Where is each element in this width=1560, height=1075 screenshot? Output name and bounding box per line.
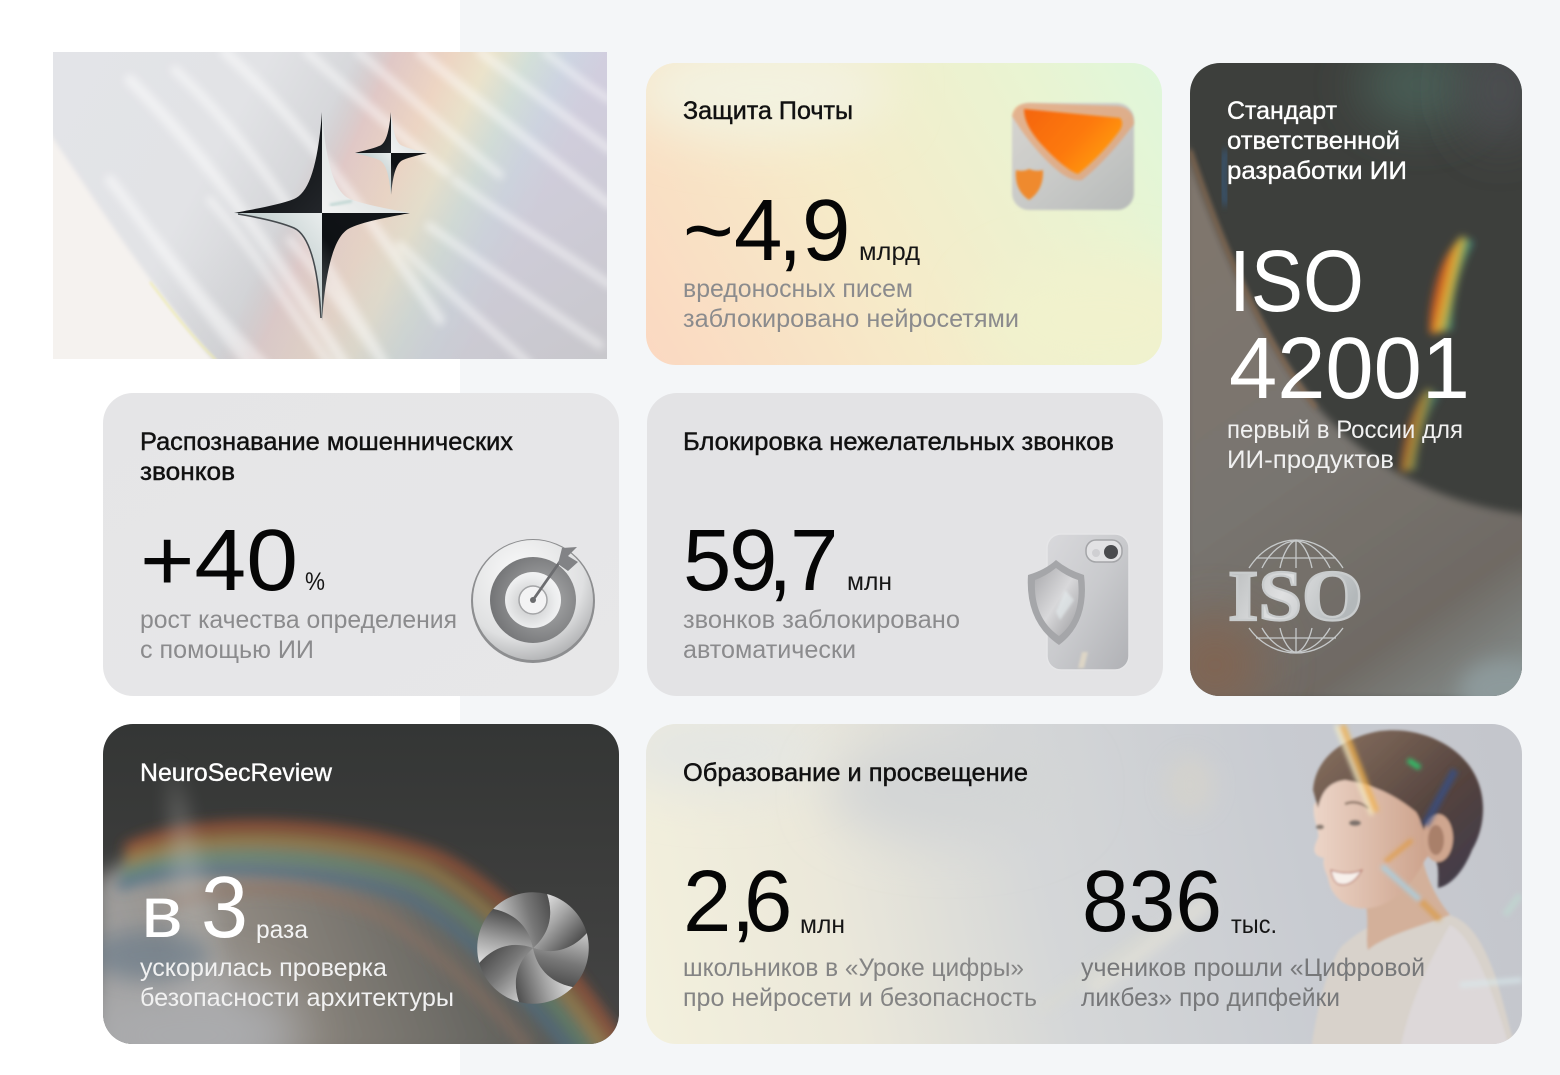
heading: AI development standard: разработки ИИ [1227, 157, 1407, 185]
big number: 2.6 million [683, 853, 845, 950]
heading: NeuroSecReview: NeuroSecReview [140, 759, 333, 787]
panel: fraud call detection [103, 393, 619, 696]
big number: 2.6 million: млн [800, 911, 845, 939]
heading: AI development standard: ответственной [1227, 127, 1400, 155]
big number: 3 times: в [141, 873, 183, 953]
big number: 836 thousand: тыс. [1231, 911, 1277, 939]
panel: ISO standard [1190, 63, 1522, 696]
big text: ISO 42001 [1229, 233, 1470, 417]
heading: fraud call detection: Распознавание мошеннических [140, 428, 513, 456]
icon: ISO logo globe: ISO [1228, 556, 1363, 636]
description: first in Russia: ИИ-продуктов [1227, 446, 1394, 474]
description: first in Russia [1227, 416, 1463, 474]
icon: chrome swirl flower [459, 874, 607, 1022]
big number: 3 times: раза [256, 916, 308, 944]
icon: large chrome star [234, 112, 410, 321]
heading: mail protection: Защита Почты [683, 97, 853, 125]
big number: plus 40 percent: +40 [140, 512, 298, 609]
description: deepfake literacy: учеников прошли «Цифровой [1081, 954, 1425, 982]
heading: fraud call detection [140, 428, 513, 486]
big number: 3 times: 3 [201, 859, 248, 956]
description: digital lesson [683, 954, 1037, 1012]
big text: ISO 42001: 42001 [1229, 320, 1470, 417]
description: faster architecture review [140, 954, 454, 1012]
description: blocked emails: заблокировано нейросетями [683, 305, 1019, 333]
big number: 4.9 billion: ~4,9 [683, 182, 850, 279]
description: first in Russia: первый в России для [1227, 416, 1463, 444]
illustration: smiling boy in profile [1311, 730, 1516, 1050]
big number: 4.9 billion: млрд [859, 238, 920, 266]
icon: silver phone with shield [1028, 534, 1129, 670]
big number: 59.7 million: 59,7 [683, 512, 838, 609]
description: deepfake literacy [1081, 954, 1425, 1012]
description: quality growth [140, 606, 457, 664]
description: calls blocked automatically: автоматически [683, 636, 856, 664]
description: faster architecture review: безопасности архитектуры [140, 984, 454, 1012]
icon: orange envelope with shield [1012, 103, 1134, 210]
big number: 3 times [141, 859, 308, 956]
description: calls blocked automatically: звонков заблокировано [683, 606, 960, 634]
icon: silver target with arrow [471, 539, 595, 663]
big number: plus 40 percent: % [305, 568, 325, 596]
panel: blocked calls [647, 393, 1163, 696]
big text: ISO 42001: ISO [1229, 233, 1364, 330]
heading: AI development standard: Стандарт [1227, 97, 1338, 125]
heading: blocked calls: Блокировка нежелательных звонков [683, 428, 1114, 456]
prism beams on boy [1336, 725, 1522, 985]
heading: AI development standard [1227, 97, 1407, 185]
heading: fraud call detection: звонков [140, 458, 235, 486]
panel: education [610, 710, 1522, 1050]
icon: small chrome star [355, 112, 427, 195]
description: digital lesson: про нейросети и безопасность [683, 984, 1037, 1012]
hero image: chrome stars on prism light [40, 52, 610, 365]
description: quality growth: рост качества определения [140, 606, 457, 634]
icon: ISO logo globe [1228, 540, 1363, 653]
description: blocked emails [683, 275, 1019, 333]
big number: 836 thousand: 836 [1082, 853, 1222, 950]
description: deepfake literacy: ликбез» про дипфейки [1081, 984, 1340, 1012]
description: digital lesson: школьников в «Уроке цифры» [683, 954, 1024, 982]
big number: 2.6 million: 2,6 [683, 853, 792, 950]
big number: 59.7 million: млн [847, 568, 892, 596]
description: faster architecture review: ускорилась проверка [140, 954, 387, 982]
description: calls blocked automatically [683, 606, 960, 664]
description: quality growth: с помощью ИИ [140, 636, 314, 664]
panel: NeuroSecReview [103, 724, 619, 1044]
panel: mail protection [646, 63, 1162, 365]
heading: education: Образование и просвещение [683, 759, 1028, 787]
description: blocked emails: вредоносных писем [683, 275, 913, 303]
